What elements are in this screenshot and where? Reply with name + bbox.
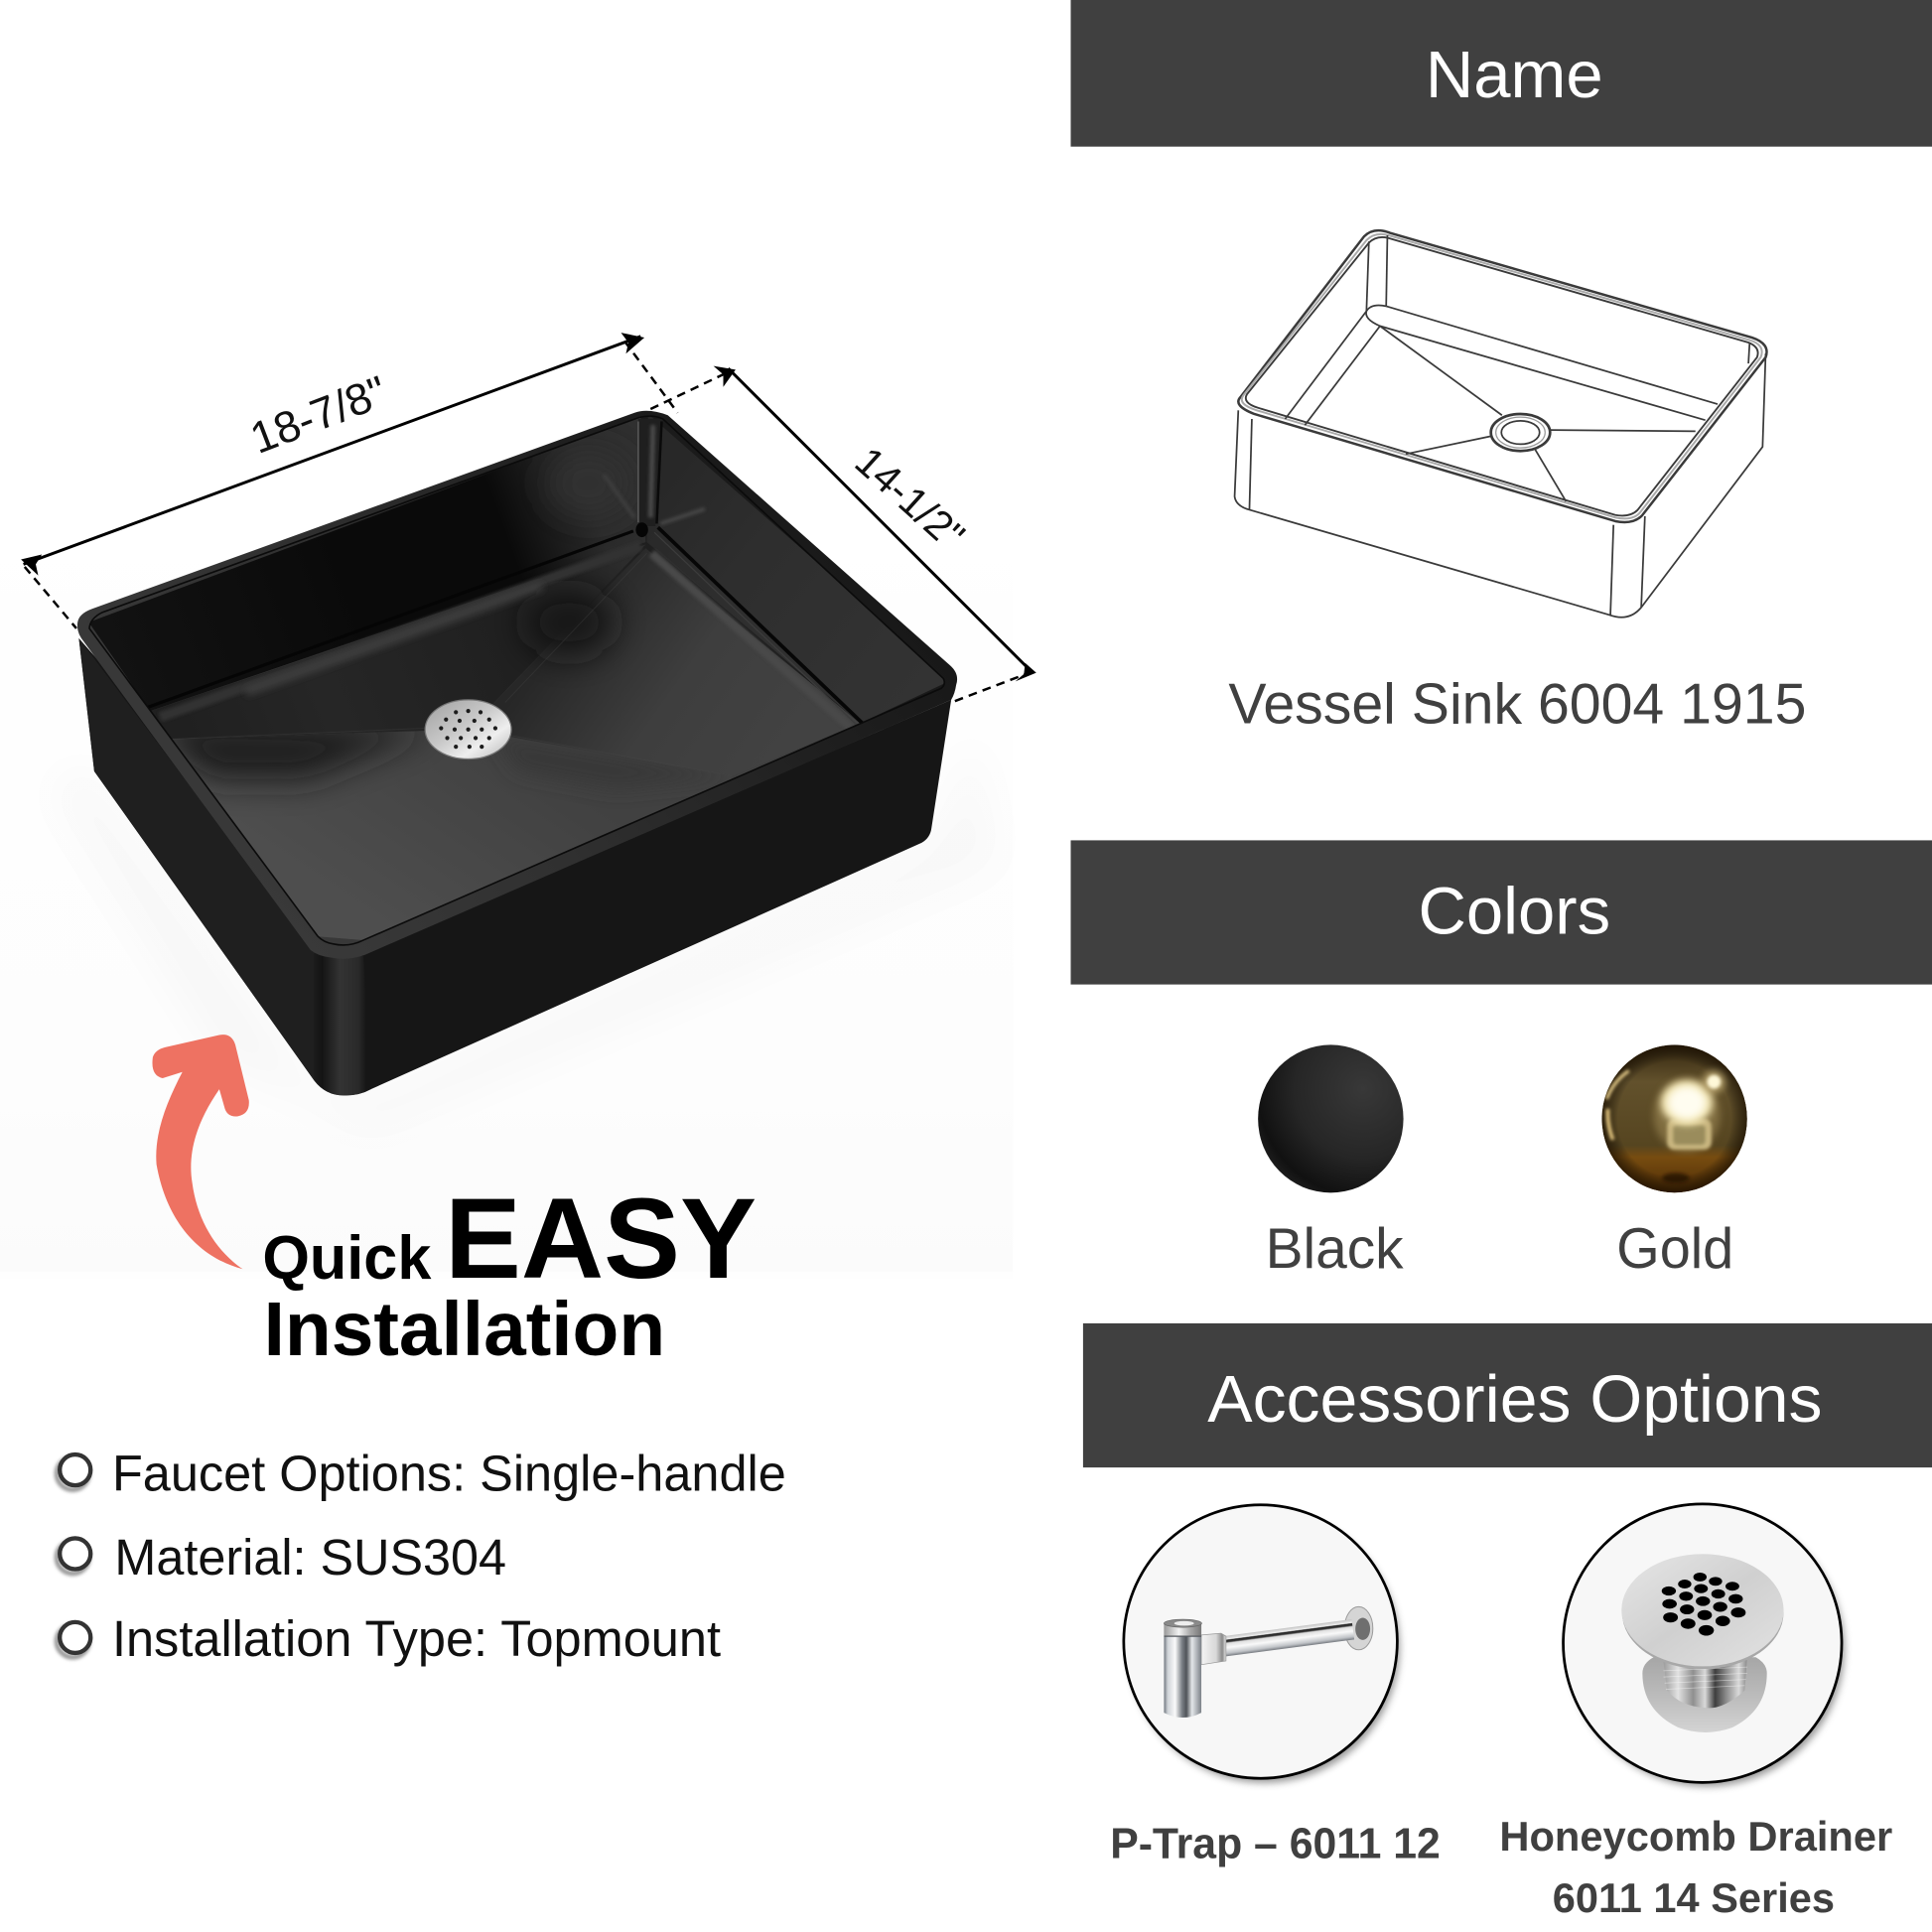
dimension: depth 14-1/2 inches bbox=[650, 366, 1036, 701]
bullet: faucet options: Faucet Options: Single-handle bbox=[112, 1446, 786, 1502]
line drawing of sink bbox=[1235, 230, 1767, 618]
swatch: gold bbox=[1601, 1044, 1747, 1281]
swatch: black bbox=[1258, 1044, 1404, 1281]
sink back wall bbox=[88, 416, 645, 711]
panel: product photo of black sink bbox=[77, 411, 957, 1096]
sink front corner highlight bbox=[314, 949, 371, 1095]
dimension: width 18-7/8 inches: 18-7/8" bbox=[244, 367, 394, 464]
chrome drain bbox=[425, 700, 511, 759]
accessory: honeycomb drainer: 6011 14 Series bbox=[1553, 1874, 1835, 1921]
sink corner drain dot bbox=[635, 522, 648, 537]
inner rim bbox=[1246, 237, 1758, 515]
sink rim bbox=[77, 411, 957, 959]
sink floor facets bbox=[142, 545, 860, 940]
panel header: accessories options bbox=[1083, 1323, 1932, 1467]
drain bbox=[1491, 414, 1550, 451]
heading: quick easy installation: Installation bbox=[264, 1287, 665, 1372]
radial seams bbox=[1380, 326, 1502, 415]
back corner strip bbox=[604, 419, 705, 526]
body bbox=[1235, 353, 1765, 618]
dimension: depth 14-1/2 inches: 14-1/2" bbox=[847, 438, 973, 559]
photo backdrop bbox=[0, 530, 1013, 1279]
accessory: p-trap: P-Trap – 6011 12 bbox=[1110, 1821, 1441, 1868]
sink soft shadow bbox=[50, 727, 998, 1134]
bullet: installation type: Installation Type: Topmount bbox=[112, 1610, 721, 1667]
interior corner bbox=[1366, 241, 1369, 311]
accessory: honeycomb drainer bbox=[1499, 1504, 1892, 1921]
heading: quick easy installation: Quick bbox=[262, 1224, 432, 1293]
swatch: gold: Gold bbox=[1616, 1217, 1733, 1281]
outer rim bbox=[1238, 230, 1767, 522]
heading: quick easy installation: EASY bbox=[445, 1175, 757, 1303]
back wall fillet bbox=[148, 531, 640, 717]
wall flange bbox=[1344, 1606, 1373, 1650]
sink right wall bbox=[647, 414, 951, 724]
floor seams bbox=[173, 553, 647, 739]
panel header: accessories options: Accessories Options bbox=[1207, 1362, 1823, 1437]
cylinder bbox=[1164, 1624, 1201, 1718]
right wall fillet bbox=[652, 527, 863, 727]
p-trap chrome pipe bbox=[1164, 1606, 1373, 1718]
rim middle line bbox=[1242, 234, 1762, 518]
horizontal arm bbox=[1222, 1619, 1354, 1657]
feature list bbox=[57, 1446, 786, 1667]
arrow: coral curved arrow pointing to sink bbox=[152, 1035, 249, 1269]
accessory: p-trap bbox=[1110, 1505, 1441, 1868]
floor dark blob bbox=[525, 590, 614, 654]
sink left face bbox=[78, 638, 314, 1080]
drainer holes bbox=[1662, 1573, 1745, 1636]
sink interior bbox=[88, 414, 951, 940]
panel header: name bbox=[1070, 0, 1932, 147]
product name: Vessel Sink 6004 1915 bbox=[1228, 673, 1806, 737]
drainer bowl and thread bbox=[1621, 1554, 1784, 1732]
back wall glow bbox=[550, 467, 586, 508]
panel header: colors bbox=[1070, 840, 1932, 985]
sink outer body bbox=[78, 638, 951, 1095]
swatch: black: Black bbox=[1266, 1217, 1404, 1281]
panel header: colors: Colors bbox=[1418, 875, 1610, 949]
dimension: width 18-7/8 inches bbox=[21, 333, 678, 628]
panel header: name: Name bbox=[1426, 38, 1603, 112]
heading: quick easy installation bbox=[262, 1175, 757, 1372]
collar bbox=[1201, 1633, 1226, 1665]
accessory: honeycomb drainer: Honeycomb Drainer bbox=[1499, 1813, 1892, 1860]
bullet: material: Material: SUS304 bbox=[114, 1529, 506, 1586]
inner rim line bbox=[89, 416, 944, 945]
